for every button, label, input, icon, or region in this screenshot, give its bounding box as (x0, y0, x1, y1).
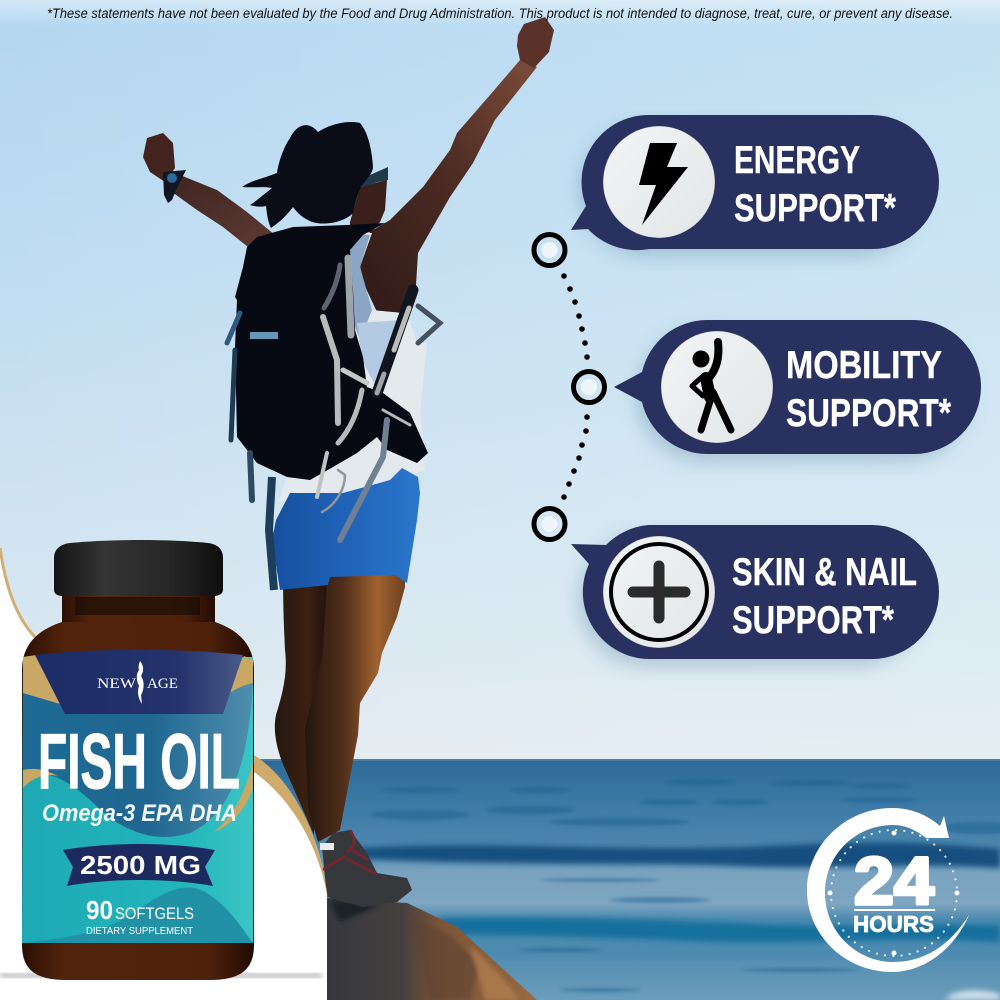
label: SUPPORT* (786, 392, 952, 435)
back leg (275, 570, 330, 835)
bubble (614, 320, 981, 454)
ring 3 (534, 508, 565, 540)
bubble (571, 525, 939, 659)
dosage banner (63, 844, 215, 886)
white tank top (278, 233, 427, 502)
rule (854, 909, 935, 911)
label: MOBILITY (786, 344, 942, 387)
label: SKIN & NAIL (732, 551, 917, 594)
hiker woman (143, 17, 554, 907)
label: ENERGY (734, 139, 860, 182)
neck (62, 592, 215, 624)
disclaimer text: *These statements have not been evaluated by the Food and Drug Administration. This product is not intended to diagnose, treat, cure, or prevent any disease. (47, 6, 953, 21)
icon: plus in circle (603, 536, 715, 648)
brand logo: AGE (147, 676, 178, 692)
ring 1 (534, 234, 565, 266)
left fist (143, 133, 175, 182)
label blue wave (23, 660, 253, 837)
subtitle: Omega-3 EPA DHA (42, 800, 237, 827)
hair (242, 122, 373, 228)
bubble (571, 115, 939, 250)
dotted connector with rings (534, 234, 604, 540)
icon: stretching figure (661, 331, 773, 443)
blue shorts (272, 468, 420, 590)
navy shield (35, 650, 243, 714)
sea (0, 759, 1000, 1000)
brand logo (97, 661, 178, 704)
dosage banner: 2500 MG (80, 850, 201, 880)
dotted ring (831, 830, 957, 956)
raised fist (517, 17, 554, 68)
ring accents (828, 830, 960, 956)
ring 2 (574, 372, 604, 402)
lower teal wave (22, 887, 253, 943)
sunglasses (360, 167, 388, 188)
gold accents (23, 655, 253, 832)
label teal base (22, 657, 253, 943)
product bottle (22, 540, 254, 980)
mobility support callout (614, 320, 981, 462)
product name: FISH OIL (38, 717, 240, 805)
white curved panel with gold rim (0, 548, 328, 1000)
icon: lightning bolt (603, 126, 715, 238)
softgel count: DIETARY SUPPLEMENT (86, 925, 194, 937)
bottle body (22, 622, 254, 980)
label: SUPPORT* (732, 599, 895, 642)
front leg (305, 570, 405, 842)
label (732, 551, 917, 642)
hours label: HOURS (853, 911, 934, 937)
neck and face (350, 180, 387, 234)
label (734, 139, 897, 230)
circular arrow (807, 808, 969, 972)
label (786, 344, 952, 435)
label: SUPPORT* (734, 187, 897, 230)
24 hours badge (807, 808, 969, 972)
dangling straps (227, 313, 274, 590)
backpack (235, 223, 428, 480)
backpack pocket tab (250, 332, 278, 339)
energy support callout (571, 115, 939, 257)
softgel count: SOFTGELS (115, 904, 194, 923)
outstretched arm (172, 175, 275, 247)
number: 24 (854, 844, 934, 919)
cap (54, 540, 223, 596)
raised arm (360, 60, 537, 313)
rock (320, 898, 537, 1000)
tank shadow tint (345, 233, 372, 340)
sky background (0, 0, 1000, 760)
brand logo: NEW (97, 676, 136, 692)
hiking shoe (320, 830, 412, 907)
softgel count (86, 895, 194, 937)
skin and nail support callout (571, 525, 939, 667)
backpack straps (317, 258, 440, 540)
dots (561, 273, 590, 500)
softgel count: 90 (86, 895, 113, 925)
watch (163, 170, 186, 203)
